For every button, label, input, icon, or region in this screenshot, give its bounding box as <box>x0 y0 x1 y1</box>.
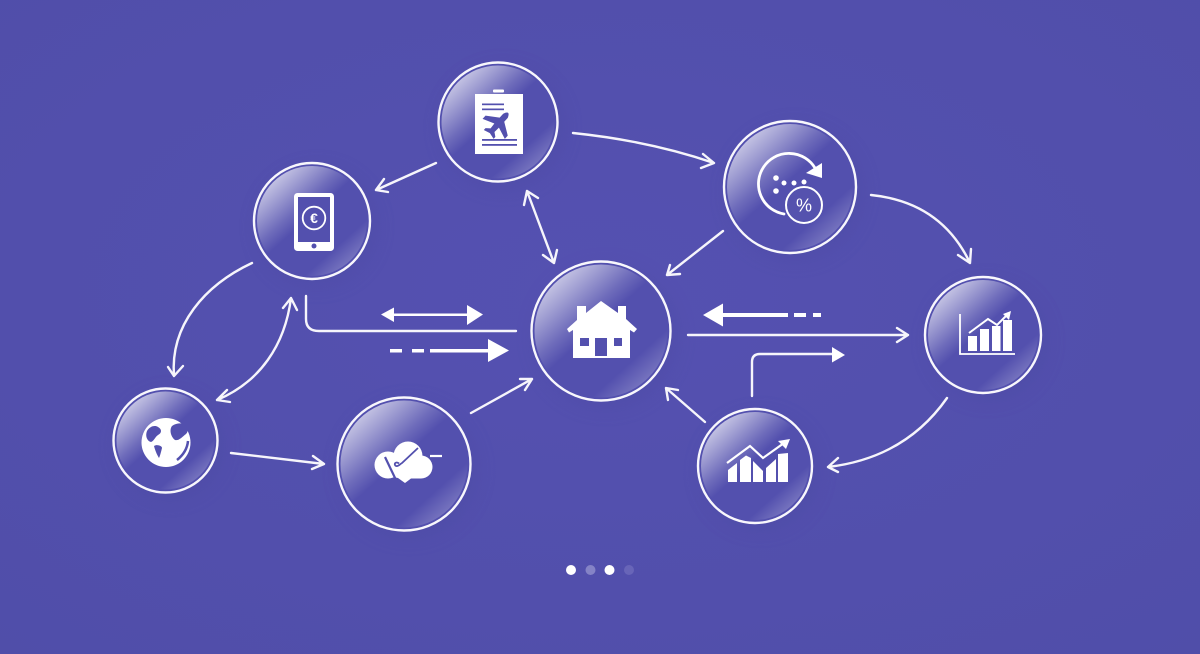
arrow: globe to cloud <box>231 453 324 469</box>
node: clipboard with airplane <box>438 62 563 188</box>
node: phone <box>254 163 375 285</box>
icon: bar chart with axes <box>960 311 1015 354</box>
arrow: house to bar chart <box>688 328 908 342</box>
node: globe <box>114 388 222 498</box>
node: trend chart <box>698 409 817 529</box>
arrow: phone to globe <box>168 263 252 376</box>
arrow: dashed thick right <box>390 339 509 362</box>
icon: circular arrow and percent badge: % <box>796 196 812 216</box>
arrow: clipboard to percent <box>573 133 714 168</box>
arrow: thick dashed left <box>703 304 821 326</box>
node: percent cycle <box>724 121 861 259</box>
icon: clipboard <box>475 90 523 154</box>
arrow: clipboard to phone <box>376 163 436 192</box>
arrow: percent to house <box>667 231 723 275</box>
arrow: phone and globe double curve <box>217 298 297 402</box>
arrow: double headed horizontal <box>381 305 483 325</box>
icon: trend bars <box>727 439 790 482</box>
icon: phone with euro: € <box>310 210 318 226</box>
pagination dots <box>566 565 634 575</box>
arrow: phone to house bent <box>306 296 516 331</box>
arrow: bar chart to trend chart <box>828 398 947 472</box>
arrow: clipboard and house double <box>524 191 557 263</box>
arrow: percent to bar chart <box>871 195 971 263</box>
icon: house <box>567 301 637 358</box>
icon: cloud <box>374 442 442 483</box>
node: chart with axes <box>925 277 1046 399</box>
arrow: bent up to right <box>752 347 845 396</box>
icon: globe <box>142 418 190 467</box>
node: house (centre) <box>532 262 676 407</box>
node: cloud with check <box>338 398 476 537</box>
arrow: trend chart to house <box>666 388 705 422</box>
arrow: cloud to house <box>471 379 532 413</box>
